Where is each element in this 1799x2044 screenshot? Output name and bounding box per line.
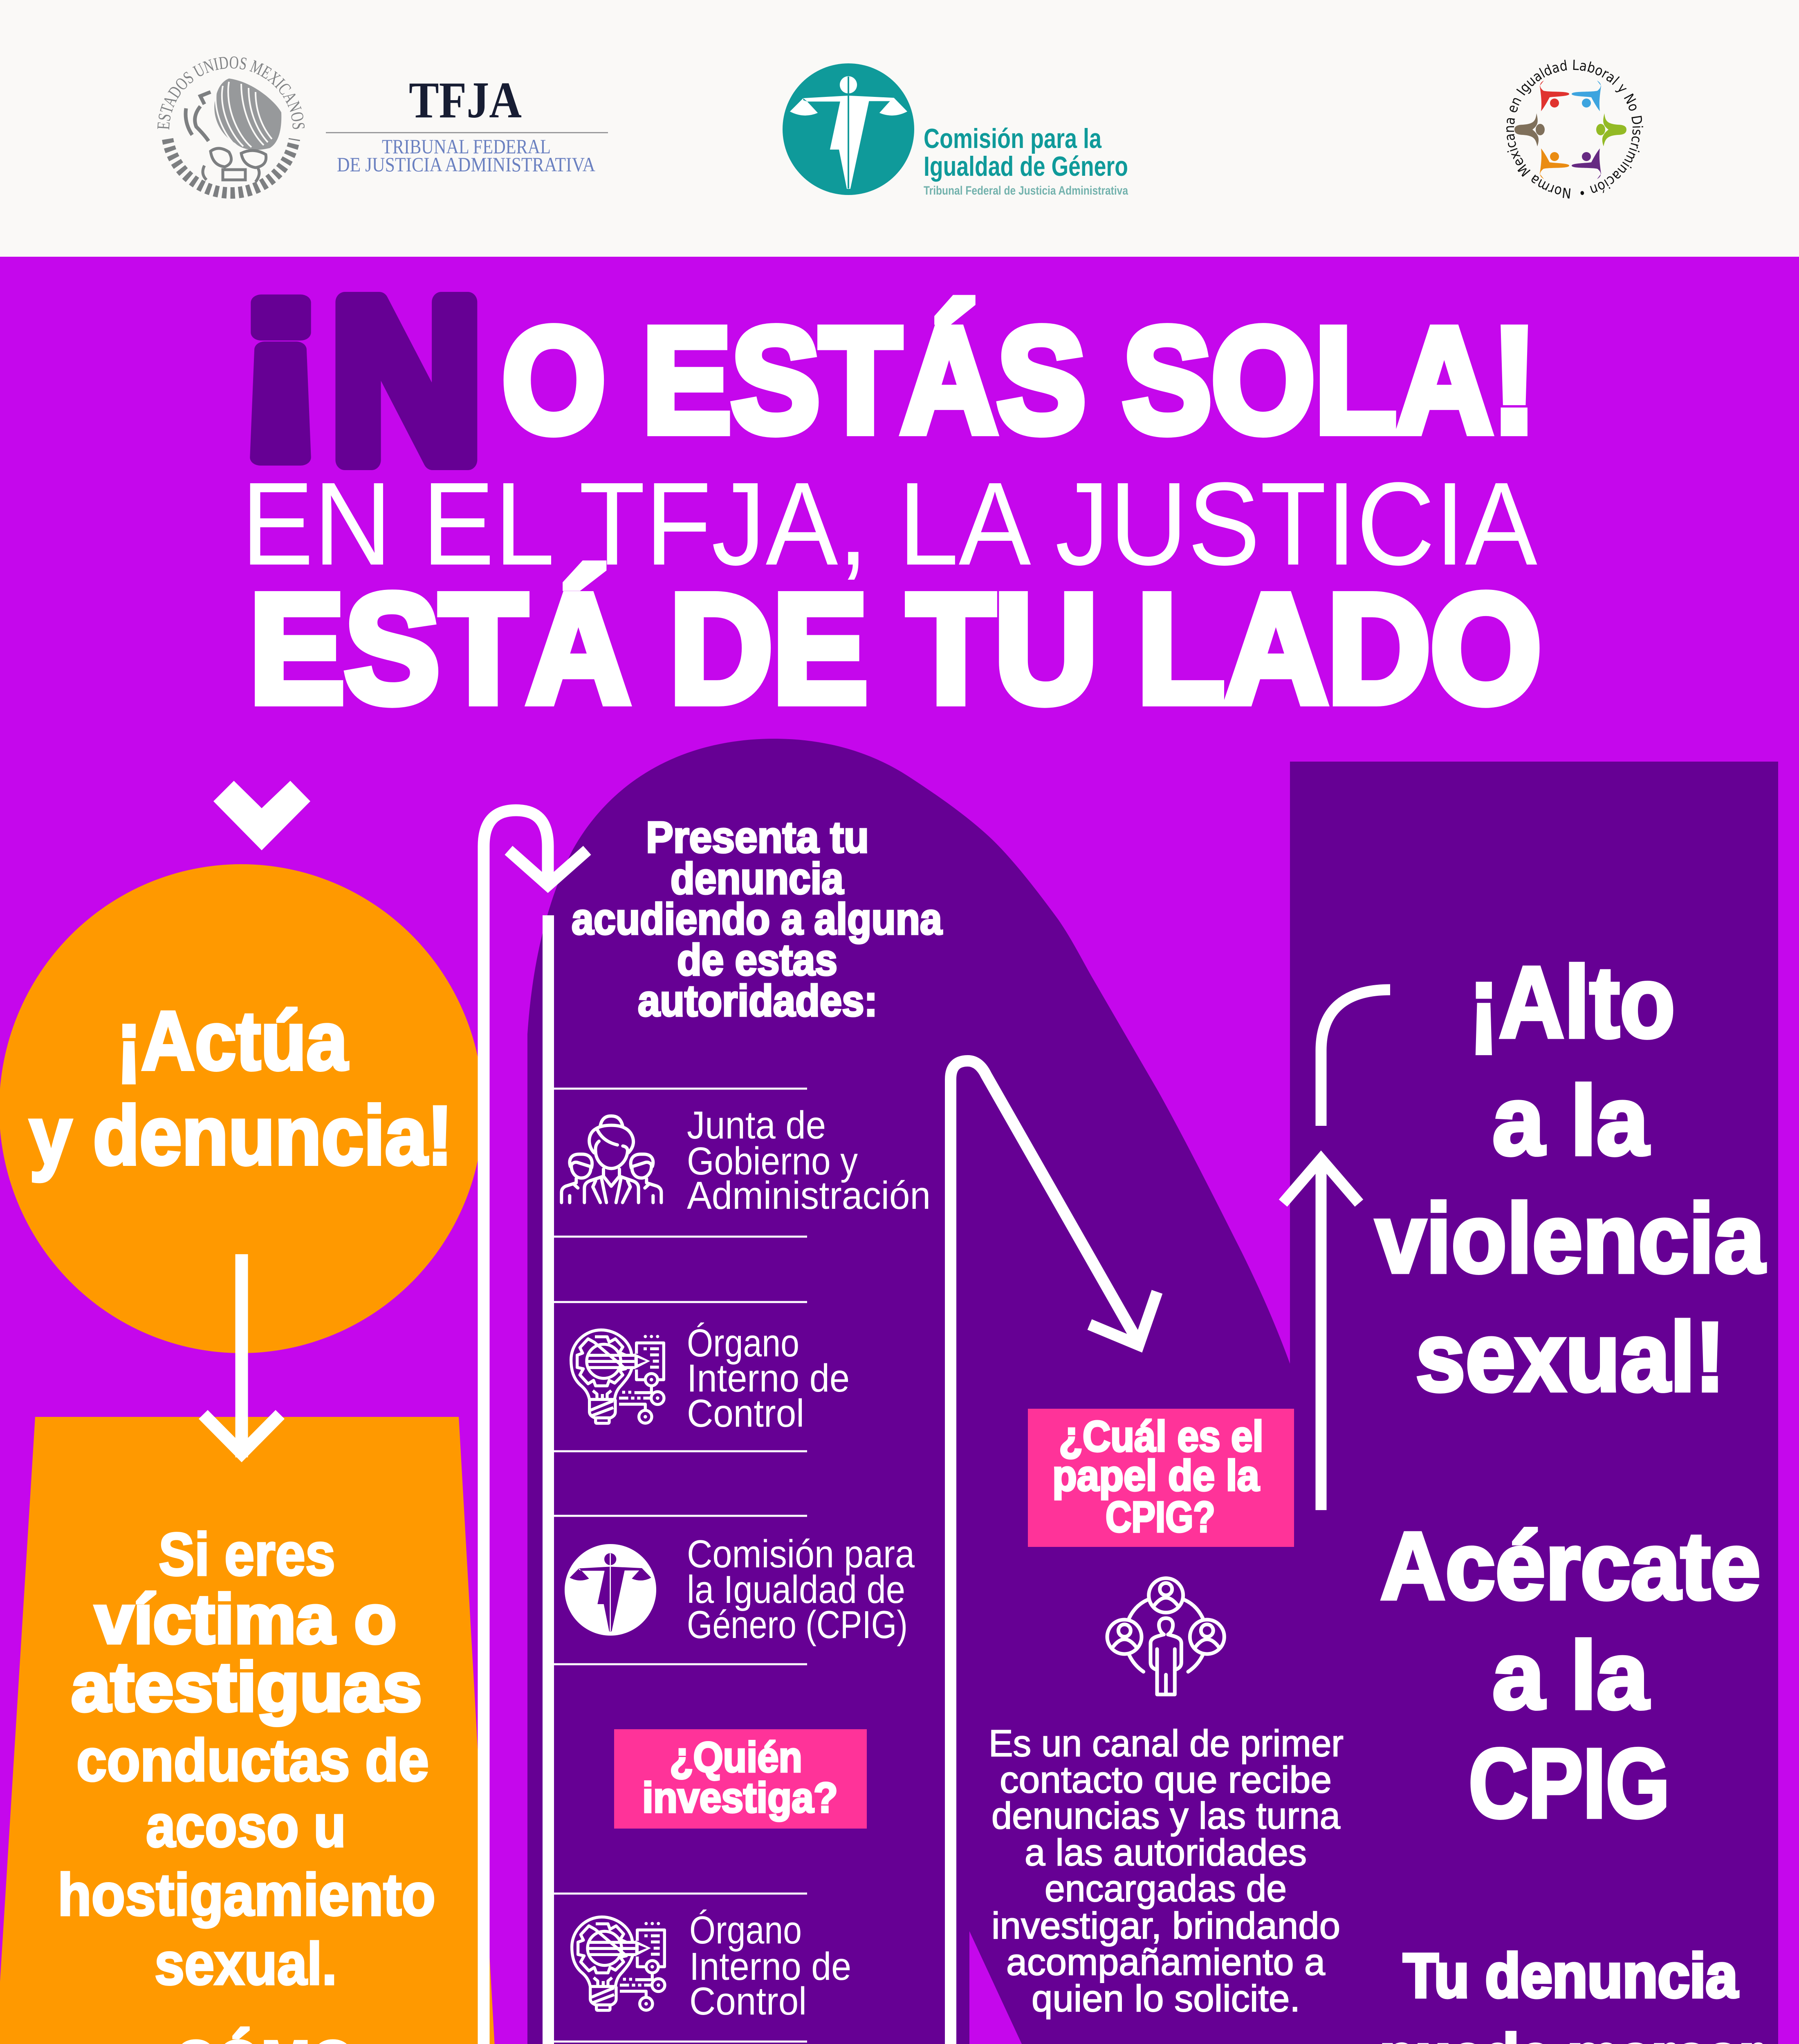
- panel: orange circle: [0, 864, 483, 1353]
- heading: alto a la violencia sexual: a la: [1492, 1066, 1649, 1175]
- icon: bulb and gear: [571, 1330, 664, 1423]
- item: Órgano Interno de Control (2): [572, 1908, 851, 2023]
- title: line 2: EN EL TFJA, LA JUSTICIA: [241, 458, 1538, 590]
- text: orange panel: víctima o: [95, 1580, 397, 1658]
- text: descripción de la CPIG: acompañamiento a: [1006, 1941, 1326, 1983]
- heading: alto a la violencia sexual: violencia: [1375, 1183, 1765, 1293]
- text: descripción de la CPIG: denuncias y las turna: [991, 1795, 1341, 1837]
- title: dark N: N: [331, 252, 482, 509]
- item: Órgano Interno de Control: Órgano: [687, 1321, 799, 1365]
- title: dark N: ¡: [233, 218, 327, 469]
- callout: cuál es el papel de la CPIG: ¿Cuál es el: [1059, 1412, 1263, 1461]
- callout: quién investiga: investiga?: [642, 1774, 838, 1822]
- heading: actúa y denuncia: ¡Actúa: [117, 994, 348, 1087]
- text: orange panel: Si eres: [159, 1521, 335, 1588]
- callout: cuál es el papel de la CPIG: papel de la: [1052, 1452, 1260, 1500]
- arrow: circle to trapezoid: [203, 1254, 280, 1457]
- item: Junta de Gobierno y Administración: Junta de: [687, 1103, 826, 1147]
- callout: cuál es el papel de la CPIG: CPIG?: [1106, 1493, 1215, 1541]
- text: presenta tu denuncia: autoridades:: [638, 976, 877, 1025]
- logo: TFJA: TFJA: [409, 72, 522, 129]
- item: Comisión para la Igualdad de Género: Comisión para: [687, 1532, 915, 1576]
- text: descripción de la CPIG: investigar, brindando: [991, 1905, 1340, 1947]
- title: [233, 218, 1541, 735]
- logo: Comisión para la Igualdad de Género: Comisión para la: [924, 123, 1102, 154]
- text: orange panel: sexual.: [155, 1930, 337, 1997]
- text: orange panel: acoso u: [146, 1793, 346, 1859]
- item: Junta de Gobierno y Administración: Gobierno y: [687, 1139, 858, 1183]
- heading: actúa y denuncia: y denuncia!: [29, 1089, 453, 1182]
- logo: Norma Mexicana: Norma Mexicana en Igualdad Laboral y No Discriminación •: [1501, 57, 1645, 201]
- arrow: trapezoid to purple panel: [248, 810, 587, 2044]
- logo: Comisión para la Igualdad de Género: Igualdad de Género: [924, 151, 1128, 182]
- text: orange panel: [47, 1521, 445, 2044]
- text: orange panel: conductas de: [76, 1727, 429, 1793]
- heading: alto a la violencia sexual: [1375, 945, 1765, 1412]
- item: Comisión para la Igualdad de Género: [565, 1532, 915, 1647]
- icon: network of people: [1107, 1578, 1224, 1694]
- item: Órgano Interno de Control: Control: [687, 1392, 804, 1435]
- panel: purple N shape: [527, 739, 1778, 2044]
- item: Comisión para la Igualdad de Género: Género (CPIG): [687, 1603, 908, 1647]
- item: Junta de Gobierno y Administración: [561, 1103, 931, 1217]
- heading: acércate a la CPIG: CPIG: [1469, 1728, 1670, 1838]
- item: Órgano Interno de Control (2): Órgano: [689, 1908, 802, 1952]
- text: presenta tu denuncia: Presenta tu: [646, 812, 869, 862]
- text: descripción de la CPIG: Es un canal de primer: [989, 1723, 1344, 1764]
- heading: alto a la violencia sexual: ¡Alto: [1469, 945, 1675, 1059]
- title: line 3: ESTÁ DE TU LADO: [249, 563, 1541, 735]
- icon: bulb and gear: [572, 1917, 665, 2010]
- heading: acércate a la CPIG: Acércate: [1380, 1512, 1761, 1619]
- text: tu denuncia puede marcar la diferencia: [1380, 1941, 1762, 2044]
- logo: national seal: [153, 52, 309, 193]
- text: presenta tu denuncia: acudiendo a alguna: [572, 894, 942, 944]
- logo: Comisión para la Igualdad de Género: [783, 63, 1128, 197]
- text: tu denuncia puede marcar la diferencia: Tu denuncia: [1403, 1941, 1738, 2010]
- item: Órgano Interno de Control: [571, 1321, 850, 1435]
- icon: people: [561, 1116, 661, 1203]
- panel: orange trapezoid: [0, 1417, 507, 2044]
- arrow: loop inside purple panel: [548, 915, 1157, 2044]
- dividers: [554, 1089, 807, 2044]
- item: Órgano Interno de Control (2): Interno de: [689, 1945, 851, 1988]
- text: orange panel: atestiguas: [71, 1648, 422, 1726]
- logo: national seal: ESTADOS UNIDOS MEXICANOS: [153, 52, 309, 130]
- callout: cuál es el papel de la CPIG: [1028, 1409, 1294, 1547]
- logo: TFJA: [326, 72, 608, 176]
- text: descripción de la CPIG: encargadas de: [1045, 1868, 1287, 1910]
- logo: TFJA: DE JUSTICIA ADMINISTRATIVA: [337, 153, 595, 176]
- icon: CPIG figure: [565, 1544, 656, 1636]
- callout: quién investiga: [614, 1729, 867, 1829]
- text: descripción de la CPIG: contacto que recibe: [1000, 1759, 1332, 1801]
- item: Junta de Gobierno y Administración: Administración: [687, 1174, 931, 1217]
- text: descripción de la CPIG: quien lo solicite.: [1032, 1978, 1300, 2019]
- title: dark N: [233, 218, 482, 509]
- icon: chevron down: [213, 781, 310, 850]
- heading: alto a la violencia sexual: sexual!: [1415, 1302, 1725, 1412]
- item: Órgano Interno de Control: Interno de: [687, 1356, 850, 1400]
- item: Órgano Interno de Control (2): Control: [689, 1979, 807, 2023]
- arrow: up: [1283, 1159, 1359, 1510]
- callout: quién investiga: ¿Quién: [670, 1734, 802, 1781]
- title: line 1: O ESTÁS SOLA!: [502, 297, 1537, 464]
- text: presenta tu denuncia: [572, 812, 942, 1025]
- heading: acércate a la CPIG: [1380, 1512, 1761, 1838]
- text: presenta tu denuncia: de estas: [677, 935, 837, 984]
- header band: [0, 0, 1799, 257]
- text: descripción de la CPIG: a las autoridades: [1025, 1832, 1307, 1874]
- arrow: curve to alto: [1321, 990, 1390, 1126]
- heading: acércate a la CPIG: a la: [1492, 1622, 1649, 1729]
- heading: actúa y denuncia: [29, 994, 453, 1182]
- text: orange panel: hostigamiento: [58, 1861, 435, 1928]
- item: Comisión para la Igualdad de Género: la Igualdad de: [687, 1568, 905, 1611]
- logo: Comisión para la Igualdad de Género: Tribunal Federal de Justicia Administrativa: [924, 184, 1128, 197]
- logo: TFJA: TRIBUNAL FEDERAL: [382, 135, 551, 158]
- text: descripción de la CPIG: [989, 1723, 1344, 2019]
- text: presenta tu denuncia: denuncia: [671, 854, 844, 903]
